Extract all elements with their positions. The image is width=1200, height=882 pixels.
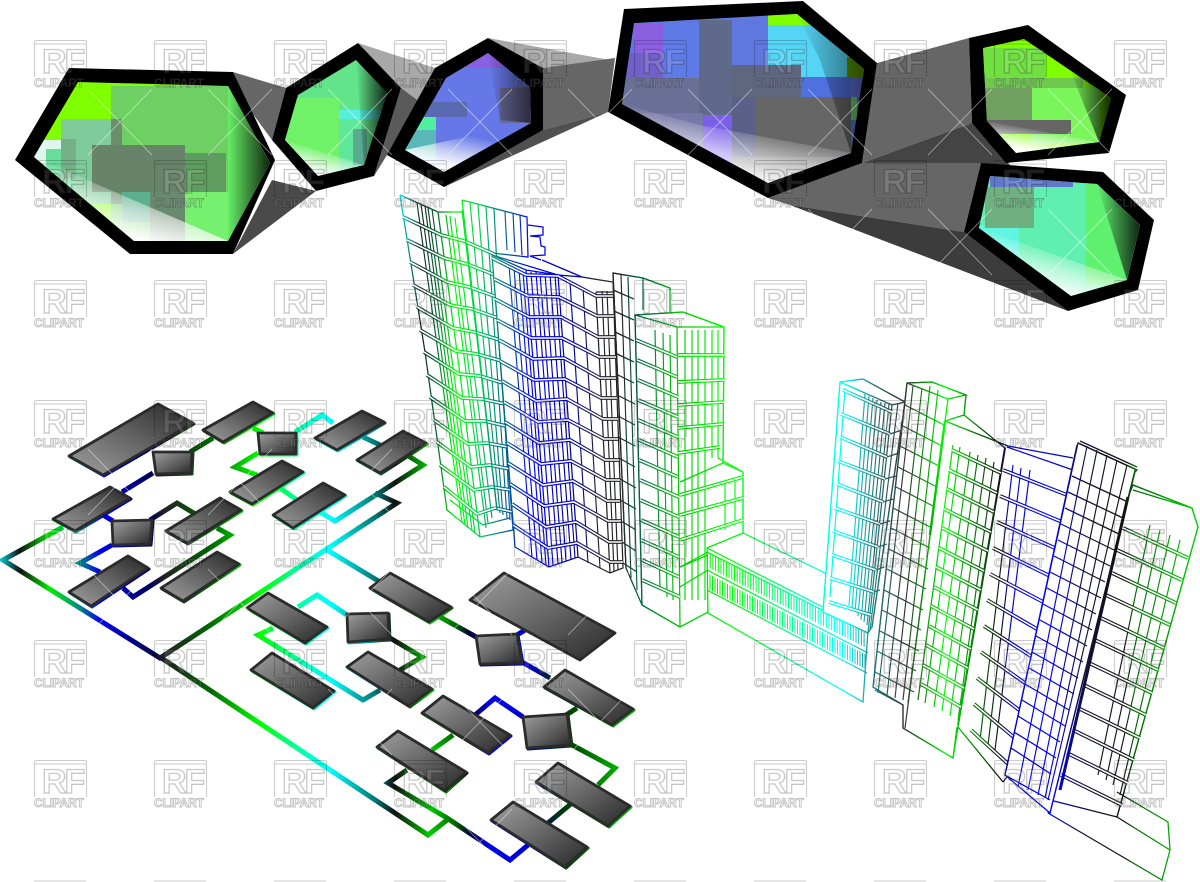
hexagon 5 [969,25,1126,163]
RF Clipart watermark grid: CLIPART [1114,436,1165,450]
RF Clipart watermark grid: CLIPART [754,556,805,570]
RF Clipart watermark grid: RF [1122,43,1165,81]
RF Clipart watermark grid: CLIPART [634,76,685,90]
RF Clipart watermark grid: RF [1002,283,1045,321]
RF Clipart watermark grid: RF [282,403,325,441]
RF Clipart watermark grid: CLIPART [1114,316,1165,330]
RF Clipart watermark grid: RF [522,523,565,561]
RF Clipart watermark grid: CLIPART [634,796,685,810]
RF Clipart watermark grid: CLIPART [994,436,1045,450]
RF Clipart watermark grid: RF [522,163,565,201]
RF Clipart watermark grid: RF [882,283,925,321]
RF Clipart watermark grid: CLIPART [754,676,805,690]
RF Clipart watermark grid: RF [402,523,445,561]
RF Clipart watermark grid: RF [882,403,925,441]
RF Clipart watermark grid: CLIPART [274,196,325,210]
RF Clipart watermark grid: RF [1002,643,1045,681]
RF Clipart watermark grid: RF [642,283,685,321]
coloured edge glow on boxes [54,403,634,868]
RF Clipart watermark grid: RF [162,163,205,201]
RF Clipart watermark grid: CLIPART [874,196,925,210]
watermark diagonal crosses [88,89,1112,875]
RF Clipart watermark grid: RF [1002,163,1045,201]
RF Clipart watermark grid: RF [162,763,205,801]
RF Clipart watermark grid: CLIPART [994,796,1045,810]
RF Clipart watermark grid: RF [1002,43,1045,81]
RF Clipart watermark grid: CLIPART [754,196,805,210]
RF Clipart watermark grid: CLIPART [754,436,805,450]
RF Clipart watermark grid: RF [522,43,565,81]
RF Clipart watermark grid: RF [642,763,685,801]
RF Clipart watermark grid: RF [1122,643,1165,681]
RF Clipart watermark grid: CLIPART [754,316,805,330]
flowchart boxes, lower cluster [247,573,633,867]
RF Clipart watermark grid: RF [882,763,925,801]
RF Clipart watermark grid: RF [282,643,325,681]
RF Clipart watermark grid: CLIPART [514,796,565,810]
RF Clipart watermark grid: RF [1122,403,1165,441]
facade: green tower with annex [635,312,743,627]
RF Clipart watermark grid: RF [402,763,445,801]
RF Clipart watermark grid: CLIPART [634,436,685,450]
RF Clipart watermark grid: CLIPART [874,556,925,570]
RF Clipart watermark grid: RF [162,523,205,561]
bridge between wings [707,533,868,702]
RF Clipart watermark grid: CLIPART [274,436,325,450]
RF Clipart watermark grid: CLIPART [1114,76,1165,90]
facade: blue grid tower [1005,441,1137,813]
RF Clipart watermark grid: RF [42,163,85,201]
RF Clipart watermark grid: CLIPART [34,76,85,90]
RF Clipart watermark grid: CLIPART [394,196,445,210]
RF Clipart watermark grid: CLIPART [34,316,85,330]
RF Clipart watermark grid: RF [522,283,565,321]
RF Clipart watermark grid: RF [402,283,445,321]
facade: green windows [918,421,1073,782]
flowchart boxes, upper cluster [53,402,426,606]
RF Clipart watermark grid: RF [762,523,805,561]
RF Clipart watermark grid: CLIPART [754,796,805,810]
RF Clipart watermark grid: RF [402,403,445,441]
RF Clipart watermark grid: RF [642,163,685,201]
facade: blue centre wing [492,255,623,573]
RF Clipart watermark grid: RF [882,523,925,561]
RF Clipart watermark grid: RF [762,643,805,681]
RF Clipart watermark grid: RF [162,403,205,441]
RF Clipart watermark grid: RF [762,283,805,321]
RF Clipart watermark grid: RF [42,403,85,441]
hexagon 2 [272,43,401,191]
flowchart connector lines [3,415,615,860]
RF Clipart watermark grid: CLIPART [34,796,85,810]
RF Clipart watermark grid: CLIPART [514,316,565,330]
RF Clipart watermark grid: RF [522,763,565,801]
RF Clipart watermark grid: CLIPART [394,556,445,570]
facade: dark green tower [613,273,670,605]
RF Clipart watermark grid: RF [42,43,85,81]
tube network: grey connectors and hexagonal openings [15,1,1154,311]
RF Clipart watermark grid: RF [642,643,685,681]
RF Clipart watermark grid: CLIPART [154,436,205,450]
RF Clipart watermark grid: CLIPART [394,676,445,690]
RF Clipart watermark grid: CLIPART [274,316,325,330]
RF Clipart watermark grid: CLIPART [514,676,565,690]
RF Clipart watermark grid: RF [642,523,685,561]
RF Clipart watermark grid: CLIPART [1114,676,1165,690]
RF Clipart watermark grid: CLIPART [1114,196,1165,210]
RF Clipart watermark grid: RF [162,283,205,321]
RF Clipart watermark grid: CLIPART [154,676,205,690]
RF Clipart watermark grid: RF [402,643,445,681]
RF Clipart watermark grid: CLIPART [274,556,325,570]
RF Clipart watermark grid: CLIPART [34,556,85,570]
hexagon 1 [15,68,280,260]
RF Clipart watermark grid: RF [402,43,445,81]
RF Clipart watermark grid: CLIPART [394,436,445,450]
RF Clipart watermark grid: CLIPART [154,196,205,210]
RF Clipart watermark grid: CLIPART [994,196,1045,210]
RF Clipart watermark grid: RF [1002,763,1045,801]
RF Clipart watermark grid: RF [282,523,325,561]
RF Clipart watermark grid: RF [882,43,925,81]
RF Clipart watermark grid: RF [762,163,805,201]
RF Clipart watermark grid: RF [402,163,445,201]
RF Clipart watermark grid: RF [882,163,925,201]
RF Clipart watermark grid: CLIPART [634,316,685,330]
RF Clipart watermark grid: RF [282,283,325,321]
RF Clipart watermark grid: CLIPART [154,556,205,570]
RF Clipart watermark grid: CLIPART [394,316,445,330]
facade: left curved wing [400,195,513,537]
RF Clipart watermark grid: RF [42,643,85,681]
RF Clipart watermark grid: CLIPART [514,76,565,90]
RF Clipart watermark grid: RF [42,763,85,801]
RF Clipart watermark grid: CLIPART [34,676,85,690]
building complex: right wing [823,379,1198,880]
RF Clipart watermark grid: RF [282,763,325,801]
hexagon 3 [387,38,543,187]
RF Clipart watermark grid: CLIPART [514,556,565,570]
RF Clipart watermark grid: RF [1122,523,1165,561]
RF Clipart watermark grid: CLIPART [274,796,325,810]
RF Clipart watermark grid: RF [162,643,205,681]
RF Clipart watermark grid: CLIPART [1114,556,1165,570]
connectors between hexagons [233,38,1068,311]
RF Clipart watermark grid: CLIPART [634,676,685,690]
facade: narrow tower strip with stepped top [462,200,545,530]
RF Clipart watermark grid: CLIPART [514,196,565,210]
RF Clipart watermark grid: RF [1002,523,1045,561]
RF Clipart watermark grid: CLIPART [994,76,1045,90]
hexagon 6 [964,163,1154,311]
RF Clipart watermark grid: RF [162,43,205,81]
building complex: left wing [400,195,743,627]
RF Clipart watermark grid: RF [1122,763,1165,801]
hexagon 4 [608,1,877,198]
RF Clipart watermark grid: CLIPART [874,796,925,810]
RF Clipart watermark grid: RF [42,523,85,561]
RF Clipart watermark grid: RF [522,403,565,441]
RF Clipart watermark grid: RF [1122,163,1165,201]
facade: cyan tower [823,379,905,633]
RF Clipart watermark grid: RF [282,163,325,201]
RF Clipart watermark grid: CLIPART [754,76,805,90]
RF Clipart watermark grid: RF [762,403,805,441]
RF Clipart watermark grid: RF [1002,403,1045,441]
flowchart [3,402,634,868]
RF Clipart watermark grid: CLIPART [34,436,85,450]
RF Clipart watermark grid: RF [42,283,85,321]
RF Clipart watermark grid: RF [642,43,685,81]
RF Clipart watermark grid: RF [522,643,565,681]
RF Clipart watermark grid: CLIPART [874,316,925,330]
RF Clipart watermark grid: RF [1122,283,1165,321]
RF Clipart watermark grid: CLIPART [154,76,205,90]
RF Clipart watermark grid: CLIPART [154,796,205,810]
RF Clipart watermark grid: CLIPART [874,676,925,690]
RF Clipart watermark grid: CLIPART [274,76,325,90]
RF Clipart watermark grid: CLIPART [274,676,325,690]
RF Clipart watermark grid: CLIPART [394,796,445,810]
RF Clipart watermark grid: RF [762,763,805,801]
RF Clipart watermark grid: CLIPART [154,316,205,330]
RF Clipart watermark grid: CLIPART [994,676,1045,690]
facade: grid tower with strip [873,382,1005,758]
RF Clipart watermark grid: CLIPART [994,316,1045,330]
RF Clipart watermark grid: CLIPART [34,196,85,210]
RF Clipart watermark grid: RF [762,43,805,81]
facade: right green block [1048,485,1198,880]
RF Clipart watermark grid: CLIPART [874,436,925,450]
RF Clipart watermark grid: RF [882,643,925,681]
RF Clipart watermark grid: CLIPART [394,76,445,90]
RF Clipart watermark grid: CLIPART [514,436,565,450]
RF Clipart watermark grid: CLIPART [1114,796,1165,810]
RF Clipart watermark grid: CLIPART [634,196,685,210]
RF Clipart watermark grid: CLIPART [634,556,685,570]
facade: blue band windows [971,447,1073,782]
RF Clipart watermark grid: CLIPART [994,556,1045,570]
RF Clipart watermark grid: RF [282,43,325,81]
RF Clipart watermark grid: RF [642,403,685,441]
RF Clipart watermark grid: CLIPART [874,76,925,90]
